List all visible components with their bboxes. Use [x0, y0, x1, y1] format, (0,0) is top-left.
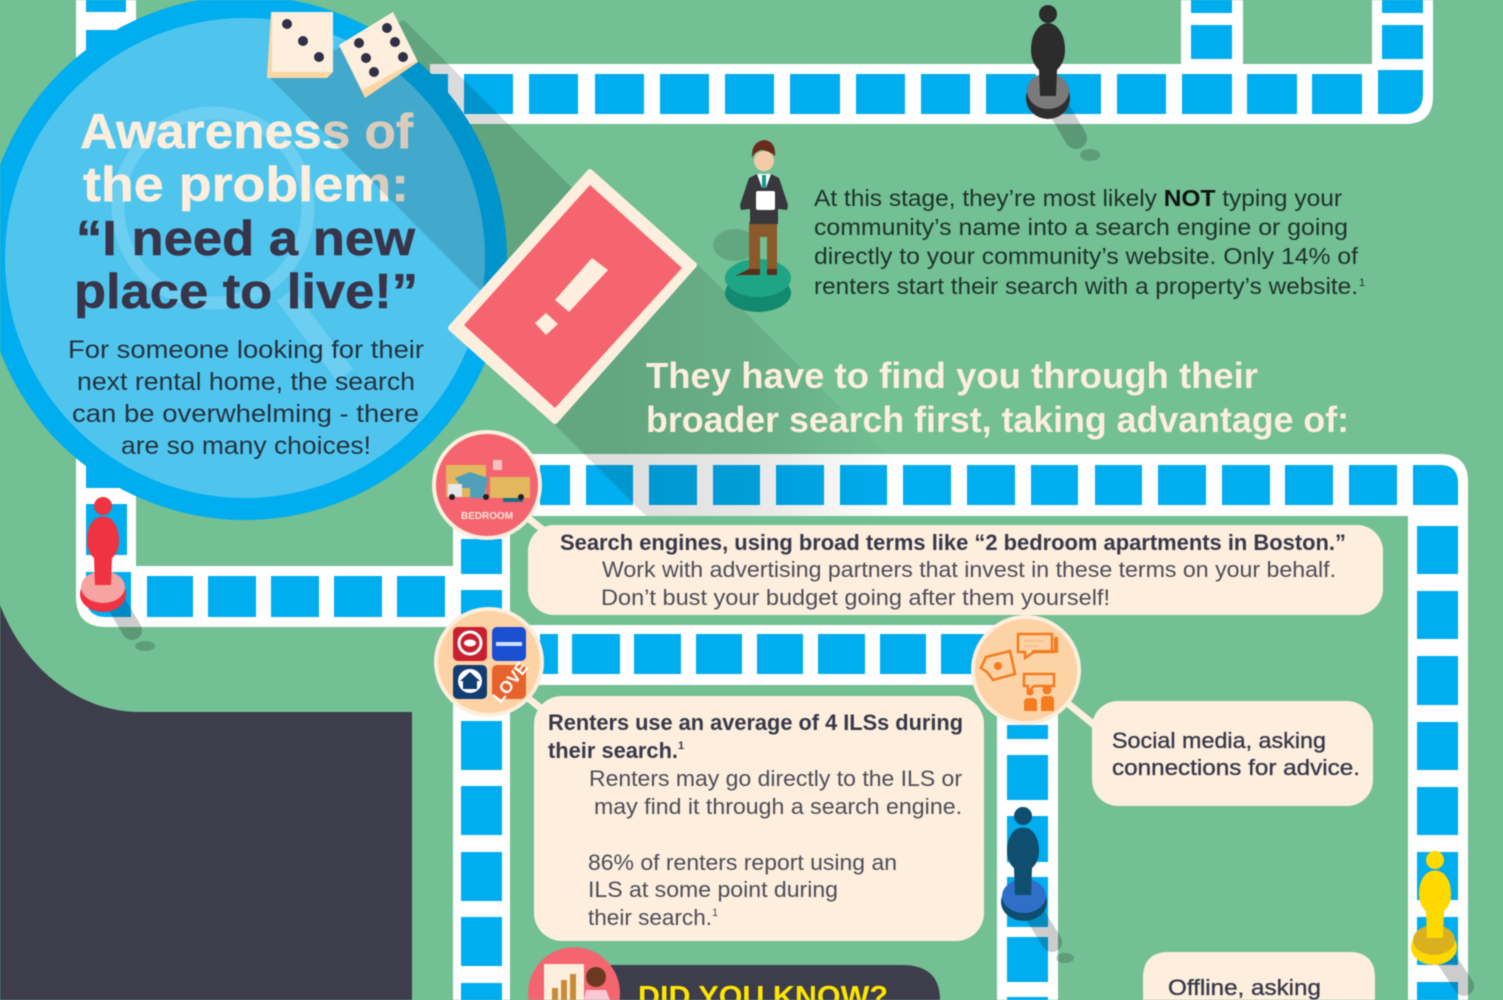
icon: warning card: [451, 172, 694, 421]
text: at this stage: 1: [1359, 277, 1365, 289]
panel: social media: connections for advice.: [1112, 755, 1360, 780]
heading: they have to find you: They have to find you through their: [646, 355, 1258, 396]
board track: left column: [453, 500, 510, 1000]
text: at this stage: community’s name into a search engine or going: [814, 214, 1348, 240]
panel: ILSs: may find it through a search engine.: [594, 794, 962, 819]
icon: die one: [267, 12, 333, 78]
panel: ILSs: 1: [712, 907, 718, 919]
heading: quote: place to live!”: [74, 265, 418, 319]
text: intro paragraph: [68, 336, 424, 460]
connectors: [528, 518, 1098, 728]
dark panel: [0, 605, 412, 1000]
icon: ILS circle: [434, 607, 544, 717]
board track: third row and centre column: [510, 625, 1058, 1000]
figure: businessman on teal base: [713, 140, 791, 312]
pawn: navy: [1001, 807, 1074, 963]
panel: social media: Social media, asking: [1112, 728, 1326, 753]
heading: awareness of the problem: the problem:: [83, 158, 409, 212]
board track: second row and right column: [530, 454, 1468, 1000]
board track: lower left row: [76, 440, 453, 627]
icon: dice: [267, 12, 418, 98]
pawn: red: [80, 497, 155, 651]
panel: ILSs: 1: [678, 740, 684, 752]
text: at this stage: At this stage, they’re most likely NOT typing your: [814, 185, 1342, 211]
callout: did you know: [528, 947, 940, 1000]
panel: offline: [1143, 952, 1375, 1000]
heading: awareness of the problem: [80, 105, 414, 212]
panel: social media: [1092, 701, 1373, 806]
icon: navy app: [453, 665, 487, 699]
icon: social circle: [971, 615, 1081, 725]
icon: bedroom circle: [432, 430, 542, 540]
panel: ILSs: 86% of renters report using an: [588, 850, 897, 875]
panel: ILSs: Renters may go directly to the ILS or: [589, 766, 962, 791]
pawn: black: [1026, 5, 1100, 161]
long shadow: dice: [270, 20, 640, 290]
icon: blue app: [492, 627, 526, 661]
panel: search engines: [528, 525, 1383, 615]
icon: die two: [339, 12, 418, 98]
panel: ILSs: [534, 696, 984, 941]
icon: magnifying glass watermark: [118, 113, 345, 375]
heading: awareness of the problem: Awareness of: [80, 105, 414, 159]
text: intro paragraph: For someone looking for their: [68, 336, 424, 364]
panel: ILSs: Renters use an average of 4 ILSs during: [548, 710, 963, 735]
heading: they have to find you: broader search first, taking advantage of:: [646, 399, 1349, 440]
long shadow: card: [555, 168, 949, 516]
heading: they have to find you: [646, 355, 1349, 440]
panel: search engines: Work with advertising partners that invest in these terms on your behalf.: [602, 557, 1336, 582]
heading: quote: “I need a new: [76, 212, 416, 266]
panel: ILSs: their search.: [548, 738, 678, 763]
panel: search engines: Search engines, using broad terms like “2 bedroom apartments in Boston.”: [560, 530, 1346, 555]
panel: ILSs: ILS at some point during: [588, 877, 838, 902]
pawn: yellow: [1411, 851, 1464, 986]
icon: bedroom circle: BEDROOM: [461, 511, 513, 522]
text: at this stage: renters start their search with a property’s website.: [814, 273, 1358, 299]
text: at this stage: directly to your community’s website. Only 14% of: [814, 243, 1359, 269]
icon: orange app: LOVE: [489, 658, 532, 706]
panel: offline: Offline, asking: [1168, 975, 1321, 1000]
icon: presenter with chart: [528, 947, 620, 1000]
board track: top row: [76, 0, 1433, 124]
panel: ILSs: their search.: [588, 905, 712, 930]
text: intro paragraph: are so many choices!: [121, 432, 371, 460]
text: intro paragraph: next rental home, the search: [77, 368, 415, 396]
panel: search engines: Don’t bust your budget going after them yourself!: [601, 585, 1110, 610]
heading: quote: [74, 212, 418, 319]
text: at this stage: [814, 185, 1365, 299]
panel: hero circle: [0, 0, 507, 520]
text: intro paragraph: can be overwhelming - there: [72, 400, 419, 428]
icon: red app: [453, 627, 487, 661]
